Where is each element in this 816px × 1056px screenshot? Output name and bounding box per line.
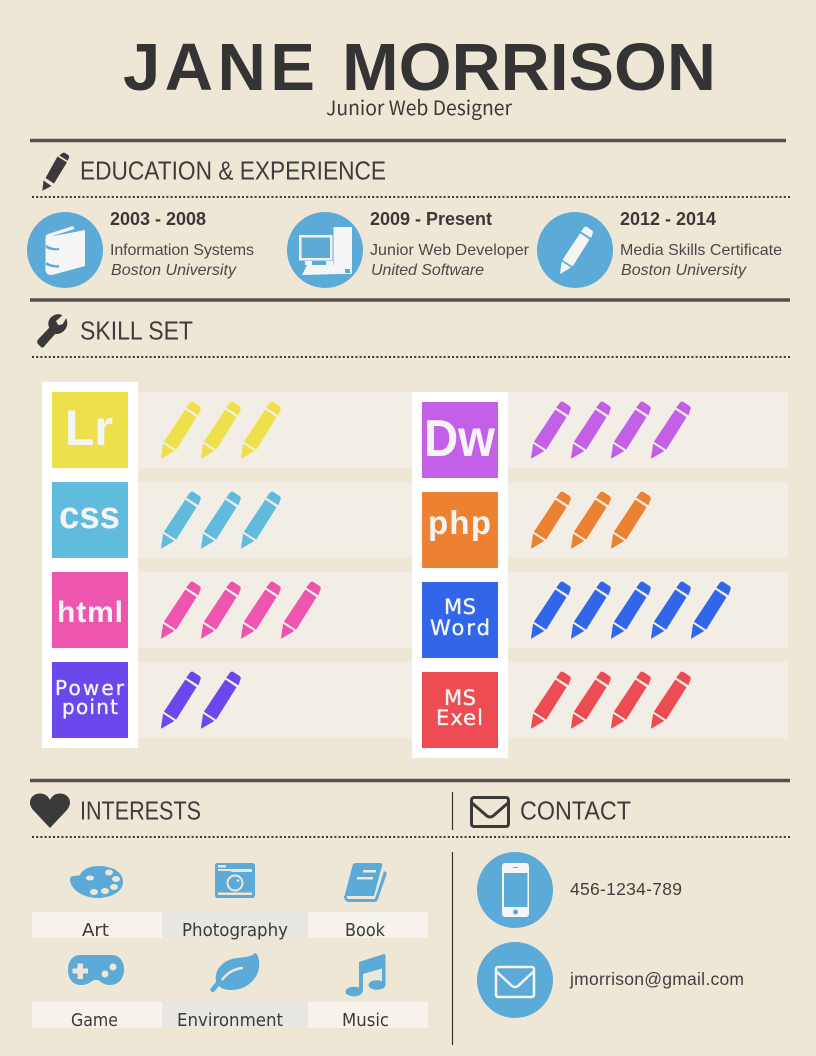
heading: interests: INTERESTS (80, 798, 201, 826)
education item 3 (537, 209, 782, 288)
interest: book (344, 863, 387, 941)
skill: MS Excel (422, 672, 690, 748)
interest: game (68, 955, 124, 1031)
icon: book (46, 226, 85, 275)
skill: MS Word: Word (430, 616, 490, 640)
panel: right skill column (412, 392, 508, 758)
interest: photography (182, 863, 288, 941)
skill: MS Excel: MS (444, 686, 476, 710)
icon: envelope (472, 798, 508, 826)
heading: contact (472, 798, 631, 826)
heading: skill set (38, 315, 193, 347)
icon: book (344, 863, 387, 902)
skill: PHP: php (428, 504, 491, 541)
skill: PowerPoint: Power (55, 676, 125, 700)
education item 3: Media Skills Certificate (620, 242, 782, 259)
skill: Lightroom (52, 392, 280, 468)
interest: environment (177, 953, 283, 1031)
skill: Dreamweaver: Dw (424, 410, 496, 468)
interest: music: Music (342, 1010, 389, 1031)
icon: music note (346, 954, 386, 996)
education item 3: 2012 - 2014 (620, 209, 716, 229)
icon: pencil (560, 227, 593, 274)
heading: education and experience: EDUCATION & EXPERIENCE (80, 158, 386, 186)
interest: art: Art (82, 920, 109, 941)
title: JANE (123, 30, 315, 105)
interest label strips (32, 912, 428, 1028)
heading: education and experience (42, 153, 386, 191)
skill: MS Word (422, 582, 730, 658)
heading: interests (30, 794, 201, 828)
heading: contact: CONTACT (520, 798, 631, 826)
skill: PHP (422, 492, 650, 568)
education item 1: Boston University (111, 262, 237, 279)
interest: art (70, 866, 123, 941)
icon: palette (70, 866, 123, 898)
icon: phone (502, 863, 529, 917)
icon: envelope (496, 967, 534, 997)
interest: environment: Environment (177, 1010, 283, 1031)
education item 2 (287, 209, 530, 288)
contact: email (477, 942, 744, 1018)
interest: book: Book (345, 920, 386, 941)
skill: PowerPoint: point (62, 695, 118, 719)
education item 2: United Software (371, 262, 484, 279)
icon: wrench (38, 315, 66, 347)
interest: photography: Photography (182, 920, 288, 941)
education item 1: Information Systems (110, 242, 254, 259)
skill: MS Excel: Exel (436, 706, 483, 730)
title: MORRISON (342, 30, 716, 105)
skill: MS Word: MS (444, 595, 476, 619)
subtitle: Junior Web Designer (326, 92, 512, 121)
contact: phone: 456-1234-789 (570, 879, 682, 899)
skill rows background strips (138, 392, 788, 738)
icon: heart (30, 794, 70, 828)
skill: CSS: css (59, 495, 120, 537)
education item 1: 2003 - 2008 (110, 209, 206, 229)
icon: game controller (68, 955, 124, 985)
icon: computer (299, 227, 352, 275)
interest: game: Game (71, 1010, 118, 1031)
title (123, 30, 716, 105)
education item 3: Boston University (621, 262, 747, 279)
education item 2: Junior Web Developer (370, 242, 530, 259)
panel: left skill column (42, 382, 138, 748)
heading: skill set: SKILL SET (80, 318, 193, 346)
icon: camera (215, 863, 255, 898)
education item 1 (27, 209, 254, 288)
icon: leaf (210, 953, 259, 992)
contact: phone (477, 852, 682, 928)
interest: music (342, 954, 389, 1031)
skill: HTML: html (57, 596, 123, 629)
skill: HTML (52, 572, 320, 648)
icon: pencil (42, 153, 69, 191)
skill: CSS (52, 482, 280, 558)
skill: Dreamweaver (422, 402, 690, 478)
skill: PowerPoint (52, 662, 240, 738)
contact: email: jmorrison@gmail.com (569, 969, 744, 989)
skill: Lightroom: Lr (65, 400, 113, 456)
education item 2: 2009 - Present (370, 209, 492, 229)
